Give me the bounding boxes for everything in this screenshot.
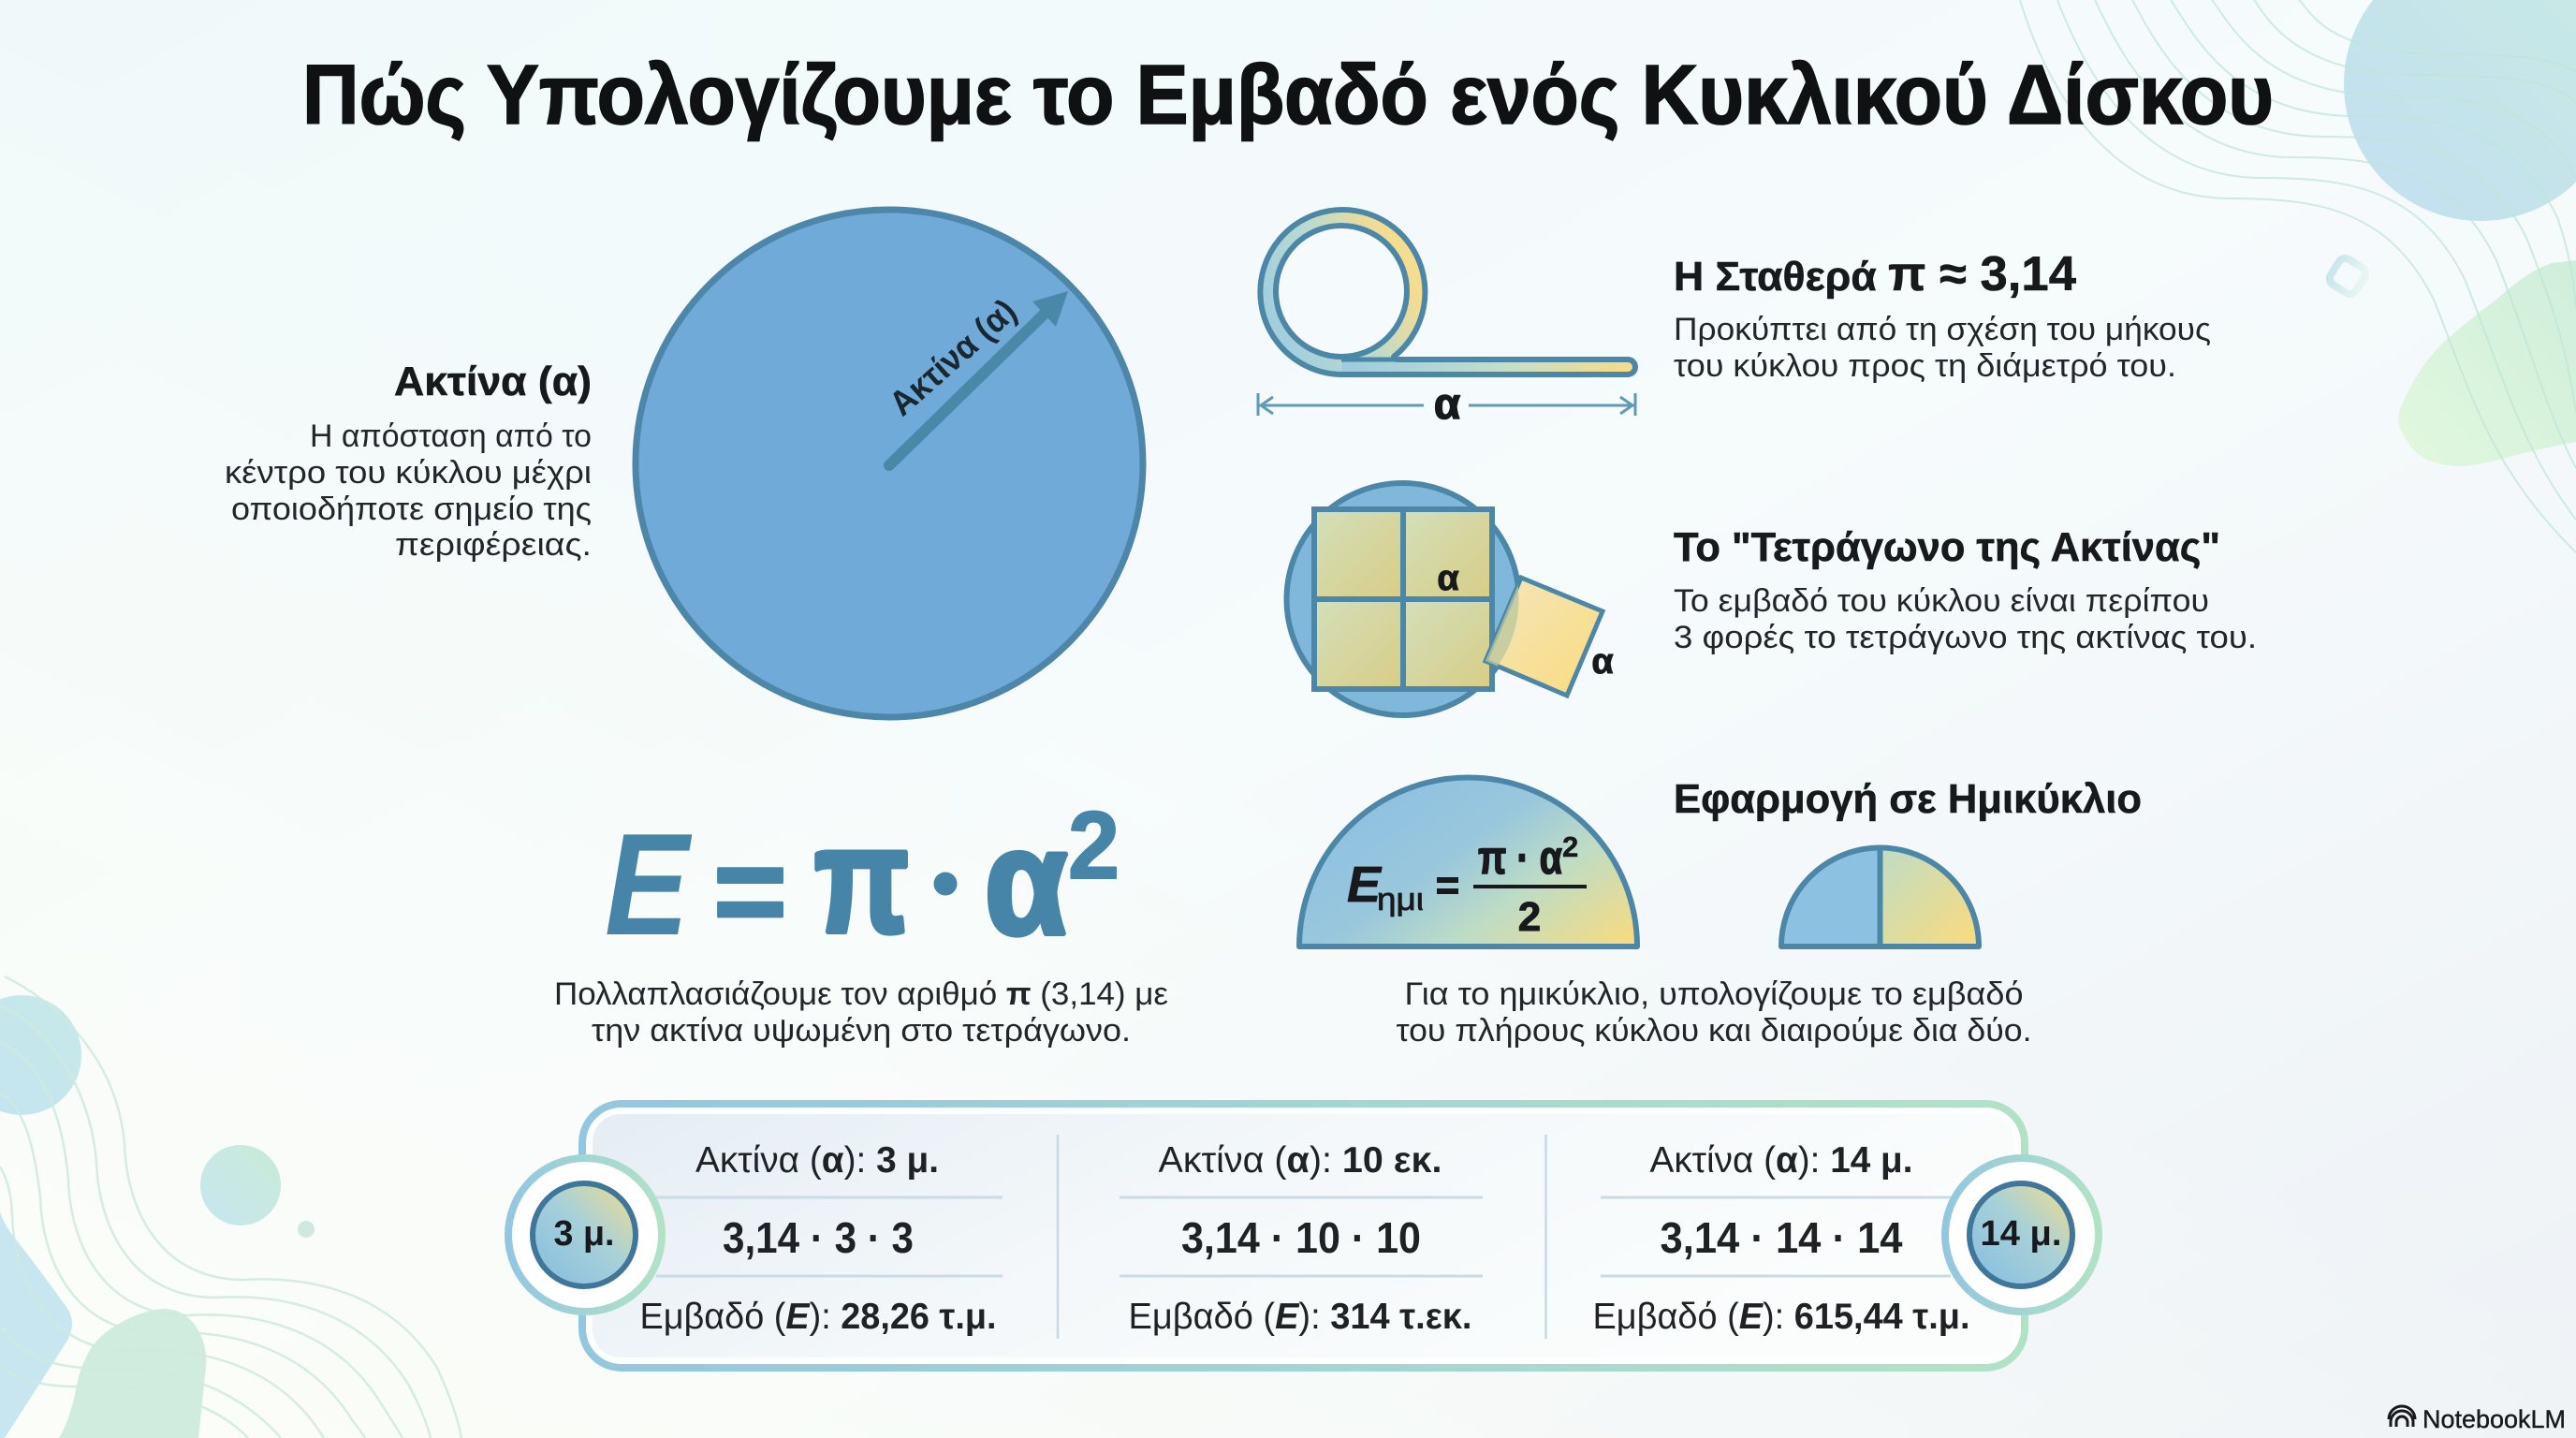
main formula: = xyxy=(713,820,787,961)
icon: semicircle with formula: π · α xyxy=(1478,831,1562,884)
example 1: Ακτίνα (α): 3 μ. xyxy=(695,1140,939,1181)
text block: square of the radius xyxy=(1674,524,2257,655)
example 2 xyxy=(1129,1140,1471,1337)
example 3: Ακτίνα (α): 14 μ. xyxy=(1649,1140,1913,1181)
main formula: E xyxy=(605,803,693,965)
badge: 3 m xyxy=(508,1158,662,1312)
main formula: π xyxy=(814,796,909,963)
example 2: 3,14 · 10 · 10 xyxy=(1181,1213,1421,1262)
dimension line alpha xyxy=(1258,379,1635,428)
text block: constant pi: Προκύπτει από τη σχέση του μήκους xyxy=(1674,312,2211,347)
example 2: Εμβαδό (E): 314 τ.εκ. xyxy=(1129,1297,1471,1337)
text block: formula explanation: Πολλαπλασιάζουμε τον αριθμό π (3,14) με xyxy=(554,976,1168,1012)
example 3 xyxy=(1593,1140,1969,1337)
logo: NotebookLM: NotebookLM xyxy=(2422,1405,2566,1433)
arrow: radius xyxy=(889,291,1068,465)
text block: constant pi: του κύκλου προς τη διάμετρό του. xyxy=(1674,348,2176,384)
example 1: Εμβαδό (E): 28,26 τ.μ. xyxy=(640,1297,996,1337)
example 3: 3,14 · 14 · 14 xyxy=(1661,1213,1903,1262)
title: Πώς Υπολογίζουμε το Εμβαδό ενός Κυκλικού Δίσκου xyxy=(302,49,2274,142)
badge: 3 m: 3 μ. xyxy=(554,1214,614,1254)
icon: squares of the radius over circle: α xyxy=(1591,642,1614,682)
icon: semicircle with formula: E xyxy=(1347,857,1383,913)
text block: semicircle explanation: Για το ημικύκλιο, υπολογίζουμε το εμβαδό xyxy=(1404,976,2024,1012)
main formula: α xyxy=(985,798,1067,965)
decoration: bottom left shapes and contour lines xyxy=(0,976,461,1438)
icon: unrolled strip loop xyxy=(1260,210,1635,374)
heading: application to semicircle: Εφαρμογή σε Ημικύκλιο xyxy=(1674,776,2142,822)
main formula xyxy=(605,792,1120,965)
text block: constant pi: Η Σταθερά π ≈ 3,14 xyxy=(1674,247,2076,301)
text block: square of the radius: Το εμβαδό του κύκλου είναι περίπου xyxy=(1674,583,2209,619)
main formula: 2 xyxy=(1068,792,1120,899)
icon: semicircle with formula: 2 xyxy=(1562,830,1578,863)
example 1: 3,14 · 3 · 3 xyxy=(723,1213,914,1262)
icon: small divided semicircle xyxy=(1781,848,1979,946)
dimension line alpha: α xyxy=(1434,379,1460,428)
icon: squares of the radius over circle: α xyxy=(1437,559,1459,598)
decoration: top right shapes and contour lines xyxy=(2020,0,2576,552)
text block: radius definition: περιφέρειας. xyxy=(395,527,592,563)
text block: radius definition: Η απόσταση από το xyxy=(310,418,592,454)
icon: semicircle with formula xyxy=(1299,777,1637,946)
text block: radius definition: οποιοδήποτε σημείο της xyxy=(231,492,592,527)
text block: square of the radius: 3 φορές το τετράγωνο της ακτίνας του. xyxy=(1674,620,2257,655)
text block: formula explanation: την ακτίνα υψωμένη στο τετράγωνο. xyxy=(592,1013,1131,1049)
icon: semicircle with formula: 2 xyxy=(1518,894,1541,940)
text block: radius definition: Ακτίνα (α) xyxy=(394,359,592,404)
text block: radius definition xyxy=(225,359,592,563)
icon: squares of the radius over circle xyxy=(1286,483,1614,715)
text block: semicircle explanation: του πλήρους κύκλου και διαιρούμε δια δύο. xyxy=(1397,1013,2031,1049)
badge: 14 m xyxy=(1945,1158,2099,1312)
icon: semicircle with formula: ημι xyxy=(1377,882,1424,917)
text block: formula explanation xyxy=(554,976,1168,1049)
example 3: Εμβαδό (E): 615,44 τ.μ. xyxy=(1593,1297,1969,1337)
badge: 14 m: 14 μ. xyxy=(1981,1214,2061,1254)
radius label on circle: Ακτίνα (α) xyxy=(882,291,1024,423)
text block: square of the radius: Το "Τετράγωνο της Ακτίνας" xyxy=(1674,524,2220,570)
text block: radius definition: κέντρο του κύκλου μέχρι xyxy=(225,455,592,491)
example 2: Ακτίνα (α): 10 εκ. xyxy=(1159,1140,1442,1181)
text block: constant pi xyxy=(1674,247,2211,384)
panel: worked examples xyxy=(582,1104,2025,1368)
text block: semicircle explanation xyxy=(1397,976,2031,1049)
main circle with radius arrow xyxy=(636,210,1143,717)
example 1 xyxy=(640,1140,996,1337)
